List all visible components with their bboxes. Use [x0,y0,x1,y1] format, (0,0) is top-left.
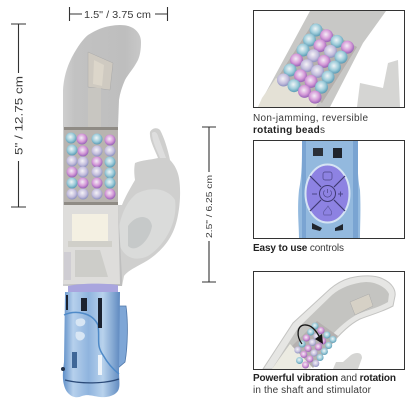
icon: rotation arrow [298,325,323,344]
panel: rotating beads [254,10,404,108]
purple band [68,284,118,292]
stimulator height dimension: 2.5" / 6.25 cm [204,175,214,238]
caption: rotating beads: Non-jamming, reversible [253,113,368,124]
caption: controls: Easy to use controls [253,243,344,254]
length dimension: 5" / 12.75 cm [14,76,26,155]
width dimension [70,7,168,21]
panel: vibration and rotation [254,272,404,370]
caption: shaft and stimulator: in the shaft and stimulator [253,385,372,396]
rabbit stimulator [110,128,180,286]
clear shaft [63,25,141,286]
stimulator height dimension [202,127,216,282]
bead section [64,127,118,205]
length dimension [11,24,26,207]
product photo [61,25,180,397]
width dimension: 1.5" / 3.75 cm [84,9,151,21]
panel: controls [254,140,404,238]
caption: rotating beads bold: rotating beads [253,125,325,136]
caption: vibration bold line: Powerful vibration and rotation [253,373,396,384]
blue handle [61,292,127,397]
